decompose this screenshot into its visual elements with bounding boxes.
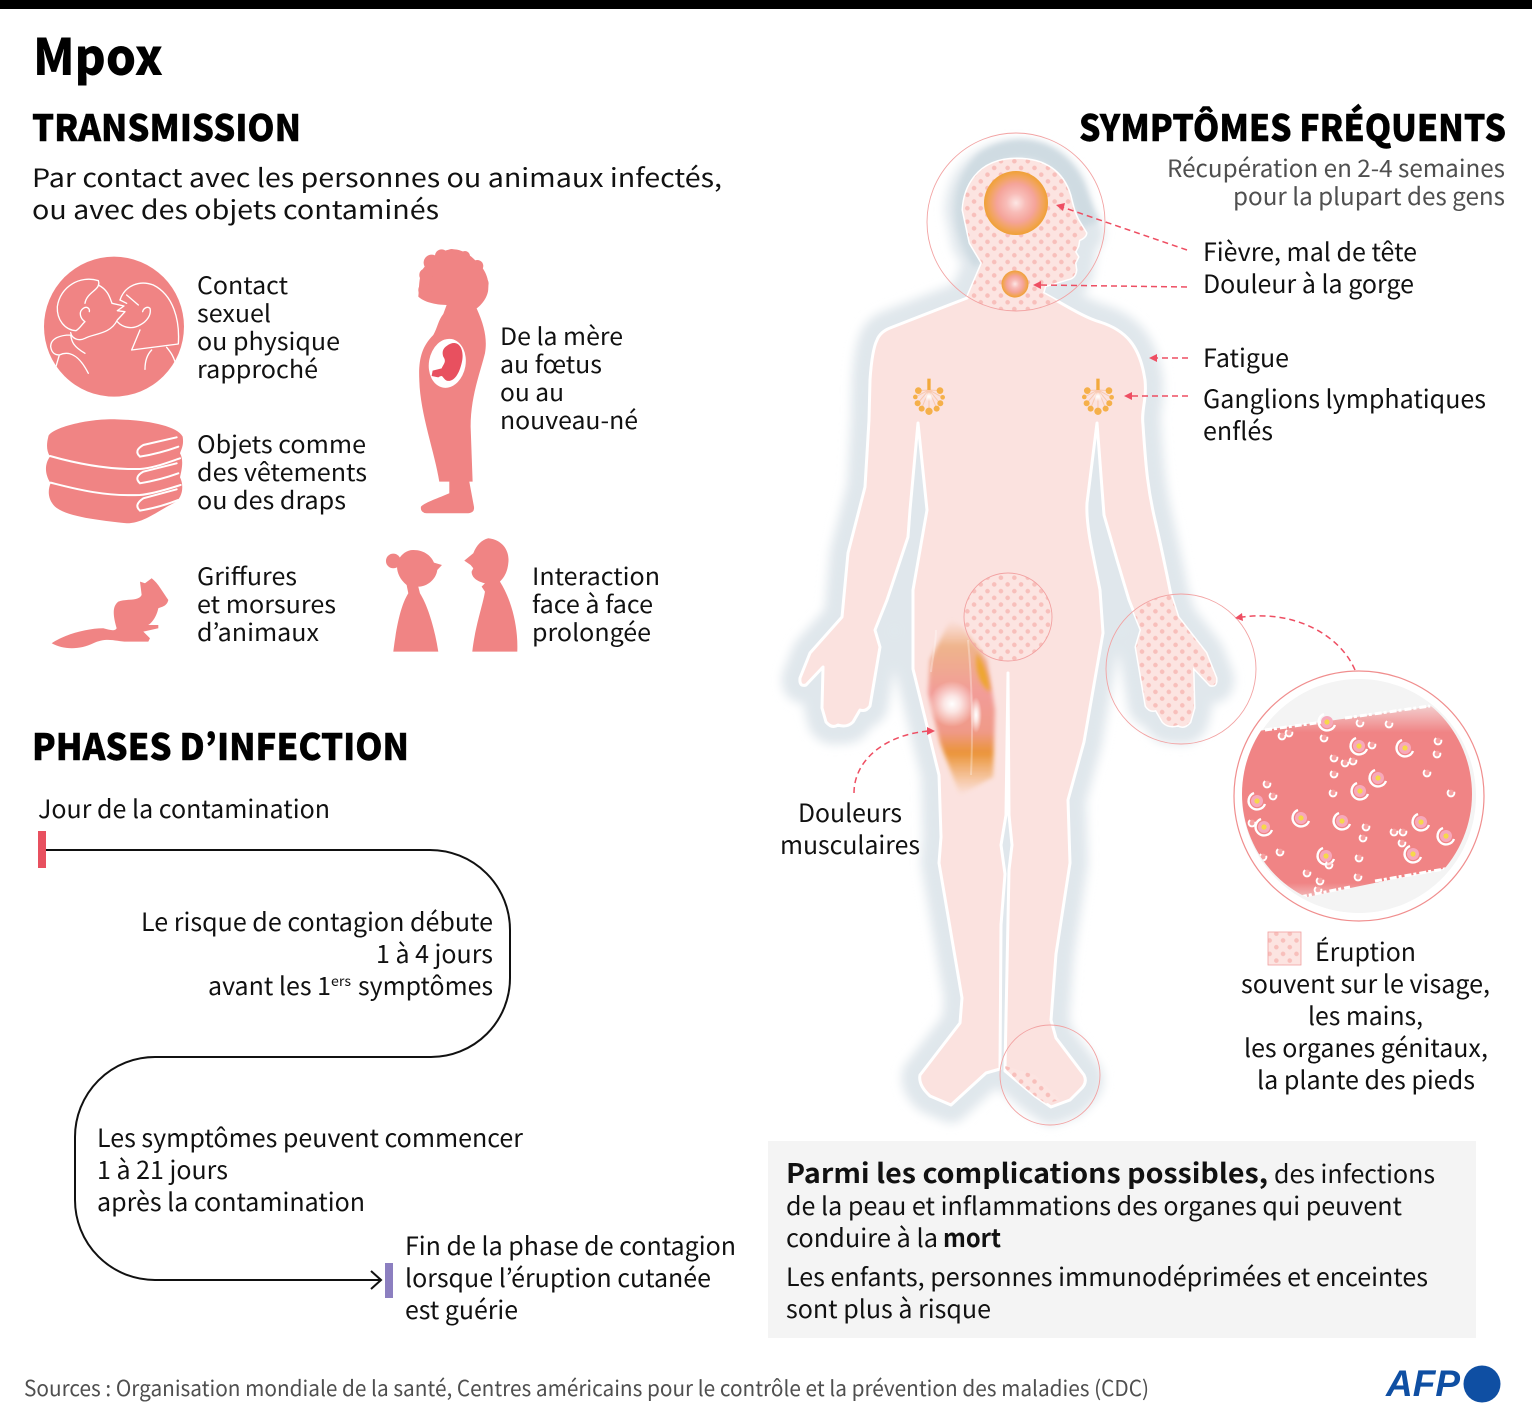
label: face to face: prolongée	[532, 613, 651, 648]
arrow: fatigue	[1149, 354, 1188, 362]
text: contagion end: lorsque l’éruption cutanée	[405, 1259, 711, 1295]
text: symptom start	[97, 1119, 523, 1219]
labels: symptoms: Ganglions lymphatiques	[1203, 380, 1486, 416]
labels: symptoms: Fièvre, mal de tête	[1203, 233, 1417, 269]
icon: folded sheets	[46, 419, 183, 523]
legend: rash text: souvent sur le visage,	[1241, 965, 1490, 1001]
label: objects: Objets comme	[197, 425, 366, 460]
subheading: recovery: pour la plupart des gens	[1233, 177, 1505, 212]
panel: complications: Les enfants, personnes immunodéprimées et enceintes	[786, 1258, 1428, 1294]
text: contagion end	[405, 1227, 736, 1327]
text: contagion start: Le risque de contagion débute	[141, 903, 493, 939]
top rule	[0, 0, 1532, 9]
transmission intro	[32, 158, 722, 227]
legend: rash text: la plante des pieds	[1257, 1061, 1475, 1097]
panel: complications: des infections	[1274, 1155, 1435, 1191]
transmission intro: ou avec des objets contaminés	[32, 190, 439, 227]
label: animals	[197, 557, 336, 648]
transmission intro: Par contact avec les personnes ou animaux infectés,	[32, 158, 722, 195]
text: contagion end: Fin de la phase de contagion	[405, 1227, 736, 1263]
label: contact: rapproché	[197, 350, 318, 385]
body halo	[800, 159, 1216, 1107]
panel: complications	[768, 1141, 1476, 1338]
timeline arrow	[46, 850, 510, 1289]
text: contagion start: symptômes	[358, 967, 493, 1003]
label: face to face: face à face	[532, 585, 653, 620]
label: muscle pain: Douleurs	[798, 794, 902, 830]
labels: symptoms: Fatigue	[1203, 339, 1289, 375]
lymph nodes	[913, 379, 1114, 415]
arrow: fever	[1056, 203, 1187, 250]
legend: rash text: les organes génitaux,	[1244, 1029, 1488, 1065]
legend: rash text	[1241, 933, 1490, 1097]
label: contact: Contact	[197, 266, 288, 301]
zoom circles	[927, 133, 1256, 1125]
label: animals: et morsures	[197, 585, 336, 620]
panel: complications: de la peau et inflammations des organes qui peuvent	[786, 1187, 1403, 1223]
text: symptom start: 1 à 21 jours	[97, 1151, 228, 1187]
heading: phases: PHASES D’INFECTION	[32, 719, 409, 771]
icon: couple kissing	[44, 257, 184, 397]
head halo	[964, 149, 1090, 263]
subheading: recovery	[1167, 149, 1505, 212]
muscle pain area	[928, 620, 995, 795]
text: symptom start: Les symptômes peuvent commencer	[97, 1119, 523, 1155]
sources: Sources : Organisation mondiale de la santé, Centres américains pour le contrôle et la prévention des maladies (CDC)	[24, 1372, 1149, 1403]
text: contagion start	[141, 903, 493, 1003]
arrow: rash to hand	[1235, 613, 1355, 670]
text: contagion start: ers	[331, 971, 351, 991]
marker: contamination day	[38, 831, 46, 868]
labels: symptoms: Douleur à la gorge	[1203, 265, 1414, 301]
label: animals: d’animaux	[197, 613, 319, 648]
rash patches	[963, 159, 1216, 1104]
label: face to face: Interaction	[532, 557, 660, 592]
label: mother to fetus	[500, 317, 638, 436]
marker: end of contagion	[385, 1263, 393, 1298]
label: objects: des vêtements	[197, 453, 367, 488]
icon: pregnant woman	[418, 249, 489, 513]
label: contamination day: Jour de la contamination	[38, 790, 330, 826]
logo: AFP: AFP	[1385, 1363, 1460, 1404]
arrow: muscle	[854, 727, 935, 793]
illustration: human body	[800, 133, 1256, 1125]
icon: two people face to face	[386, 538, 517, 652]
text: contagion start: 1 à 4 jours	[376, 935, 493, 971]
panel: complications: conduire à la	[786, 1219, 938, 1255]
label: objects	[197, 425, 367, 516]
arrow: throat	[1033, 281, 1187, 289]
heading: transmission: TRANSMISSION	[32, 100, 301, 152]
label: muscle pain: musculaires	[780, 826, 920, 862]
label: mother to fetus: au fœtus	[500, 345, 602, 380]
body silhouette	[800, 159, 1216, 1107]
label: objects: ou des draps	[197, 481, 346, 516]
label: face to face	[532, 557, 660, 648]
label: contact	[197, 266, 340, 385]
panel: complications: Parmi les complications possibles,	[786, 1152, 1268, 1191]
label: muscle pain	[780, 794, 920, 862]
heading: symptoms: SYMPTÔMES FRÉQUENTS	[1079, 100, 1506, 152]
label: contact: sexuel	[197, 294, 271, 329]
label: mother to fetus: ou au	[500, 373, 564, 408]
text: contagion start: avant les 1	[208, 967, 331, 1003]
legend: rash swatch	[1268, 932, 1301, 965]
sore throat circle	[1002, 270, 1028, 298]
subheading: recovery: Récupération en 2-4 semaines	[1167, 149, 1505, 184]
legend: rash text: Éruption	[1315, 933, 1416, 969]
logo: AFP	[1385, 1363, 1500, 1404]
label: contact: ou physique	[197, 322, 340, 357]
fever circle	[984, 171, 1048, 235]
legend: rash text: les mains,	[1308, 997, 1423, 1033]
text: symptom start: après la contamination	[97, 1183, 365, 1219]
label: mother to fetus: De la mère	[500, 317, 623, 352]
skin rash magnified	[1230, 671, 1490, 921]
panel: complications: sont plus à risque	[786, 1290, 991, 1326]
panel: complications: mort	[943, 1219, 1001, 1255]
title: Mpox	[33, 18, 163, 90]
icon: squirrel	[52, 578, 168, 648]
label: mother to fetus: nouveau-né	[500, 401, 638, 436]
text: contagion end: est guérie	[405, 1291, 518, 1327]
arrow: lymph nodes	[1124, 392, 1188, 400]
labels: symptoms	[1203, 233, 1486, 448]
label: animals: Griffures	[197, 557, 297, 592]
labels: symptoms: enflés	[1203, 412, 1273, 448]
